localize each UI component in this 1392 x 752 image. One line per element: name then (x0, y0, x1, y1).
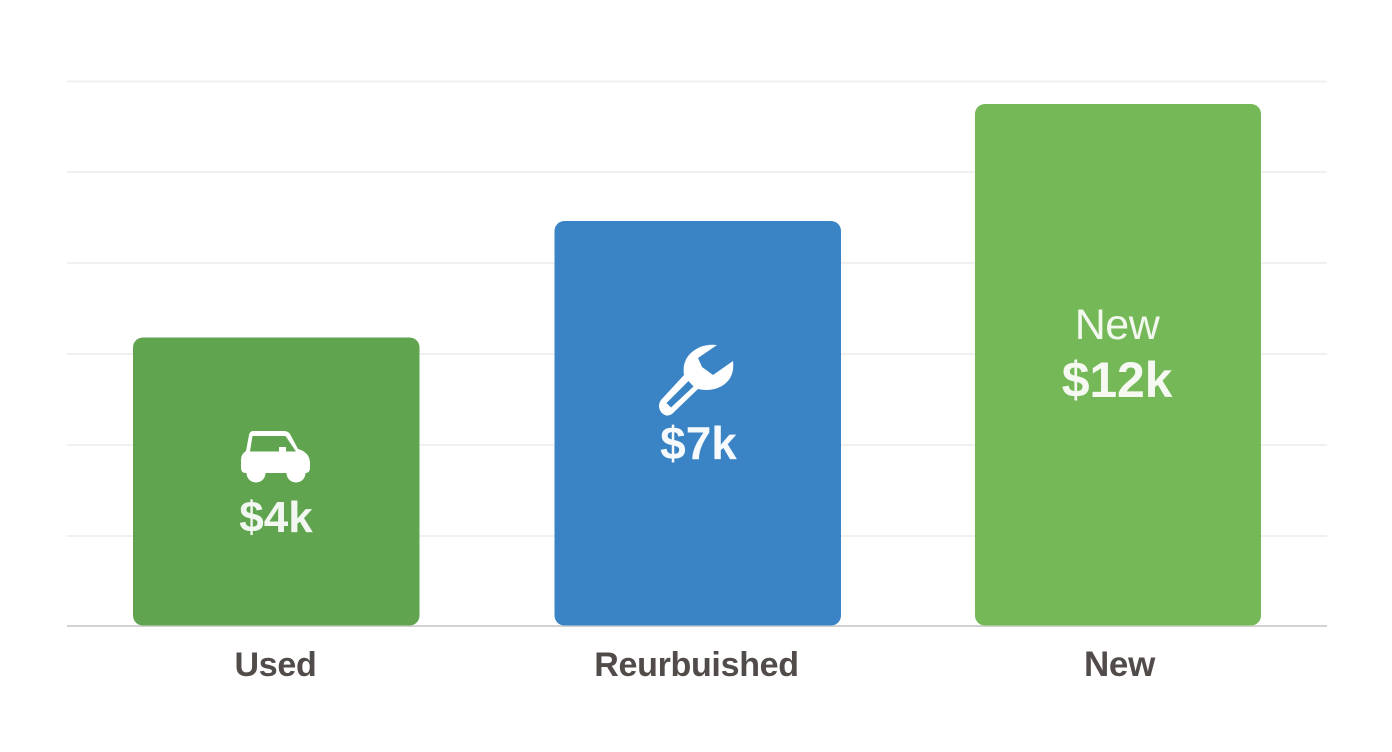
label: New: New (1075, 301, 1161, 349)
bar: used (133, 338, 420, 626)
value: $7k: $7k (660, 417, 737, 469)
icon: car (241, 431, 310, 482)
axis label: Used: Used (235, 646, 316, 684)
axis label: New: New (1084, 645, 1156, 684)
bar: refurbished (554, 221, 841, 626)
value: $12k: $12k (1062, 352, 1173, 408)
icon: wrench (659, 345, 733, 416)
axis label: Reurbuished: Reurbuished (594, 646, 799, 684)
value: $4k: $4k (239, 493, 313, 542)
bar: new (975, 104, 1261, 626)
